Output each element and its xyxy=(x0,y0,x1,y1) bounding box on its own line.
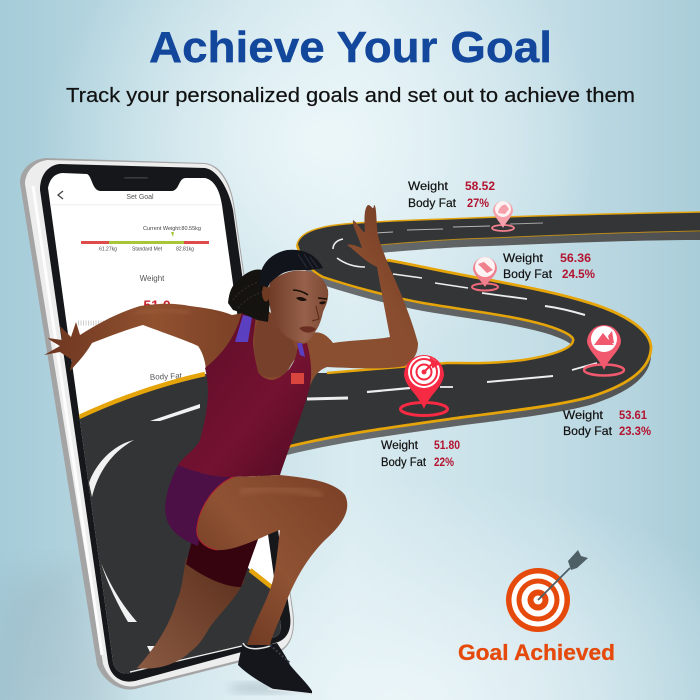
back leg xyxy=(137,558,245,669)
front thigh and shin xyxy=(197,475,347,645)
stat label 53.61 / 23.3%: Weight xyxy=(563,408,604,422)
weight readout: Weight xyxy=(140,274,165,283)
stat label 56.36 / 24.5%: Weight xyxy=(503,251,544,265)
runner xyxy=(44,205,418,694)
milestone pin 53.61 xyxy=(584,325,624,376)
milestone pin 58.52 xyxy=(492,201,514,231)
stat label 58.52 / 27%: Body Fat xyxy=(408,196,457,210)
stat label 51.80 / 22% xyxy=(381,440,460,469)
weight range bar: Current Weight:80.55kg xyxy=(143,226,201,232)
stat label 58.52 / 27%: 58.52 xyxy=(465,179,495,193)
milestone pin 56.36 xyxy=(472,257,498,290)
shorts piping xyxy=(197,477,233,550)
stat label 56.36 / 24.5%: Body Fat xyxy=(503,267,553,281)
winding road xyxy=(260,212,700,460)
weight range bar: 61.27kg xyxy=(99,246,117,252)
phone screen xyxy=(48,173,281,674)
stat label 56.36 / 24.5%: 24.5% xyxy=(562,267,595,281)
app header: Set Goal xyxy=(126,194,154,201)
stat label 58.52 / 27% xyxy=(408,179,495,210)
lower shorts xyxy=(186,528,262,587)
singlet blue panels xyxy=(235,315,305,357)
stat label 58.52 / 27%: 27% xyxy=(467,196,489,210)
ear xyxy=(262,284,270,302)
thigh highlight xyxy=(240,489,322,496)
stat label 53.61 / 23.3%: 23.3% xyxy=(619,424,651,438)
stat label 58.52 / 27%: Weight xyxy=(408,179,449,193)
hair bun xyxy=(228,270,270,322)
weight range bar: Standard Met xyxy=(132,246,163,252)
stat label 53.61 / 23.3%: Body Fat xyxy=(563,424,613,438)
neck xyxy=(254,305,298,377)
stat label 56.36 / 24.5% xyxy=(503,251,595,281)
smartphone xyxy=(20,158,300,690)
stat label 51.80 / 22%: 22% xyxy=(434,457,454,469)
stat label 51.80 / 22%: Weight xyxy=(381,440,419,452)
hair xyxy=(260,250,323,287)
icon: target with arrow xyxy=(506,550,588,632)
shoe shadow xyxy=(228,682,296,694)
left arm xyxy=(44,304,243,371)
upper shorts xyxy=(165,465,236,546)
right arm xyxy=(298,205,418,392)
singlet xyxy=(178,312,311,477)
stat label 51.80 / 22%: Body Fat xyxy=(381,457,427,469)
singlet flag patch xyxy=(291,373,304,384)
body fat label: Body Fat xyxy=(150,371,183,382)
milestone pin 51.80 xyxy=(400,355,448,416)
weight readout xyxy=(78,274,171,323)
arm highlight xyxy=(135,310,190,314)
torso skin xyxy=(250,318,302,385)
stat label 51.80 / 22%: 51.80 xyxy=(434,440,460,452)
title: Achieve Your Goal xyxy=(149,23,552,72)
stat label 56.36 / 24.5%: 56.36 xyxy=(560,251,591,265)
road lane dashes xyxy=(307,223,597,399)
weight readout: 51.0 xyxy=(143,297,171,313)
lower-left phone shadow xyxy=(0,565,115,700)
road inside phone xyxy=(79,372,281,674)
facial features xyxy=(293,290,327,333)
weight range bar: 82.81kg xyxy=(176,246,194,252)
shoe xyxy=(238,643,312,694)
goal achieved label: Goal Achieved xyxy=(458,640,615,665)
stat label 53.61 / 23.3% xyxy=(563,408,651,438)
stat label 53.61 / 23.3%: 53.61 xyxy=(619,408,647,422)
app header xyxy=(50,191,222,205)
face xyxy=(268,270,328,343)
weight range bar xyxy=(81,226,209,252)
subtitle: Track your personalized goals and set out to achieve them xyxy=(66,85,635,107)
notch speaker xyxy=(124,177,148,179)
